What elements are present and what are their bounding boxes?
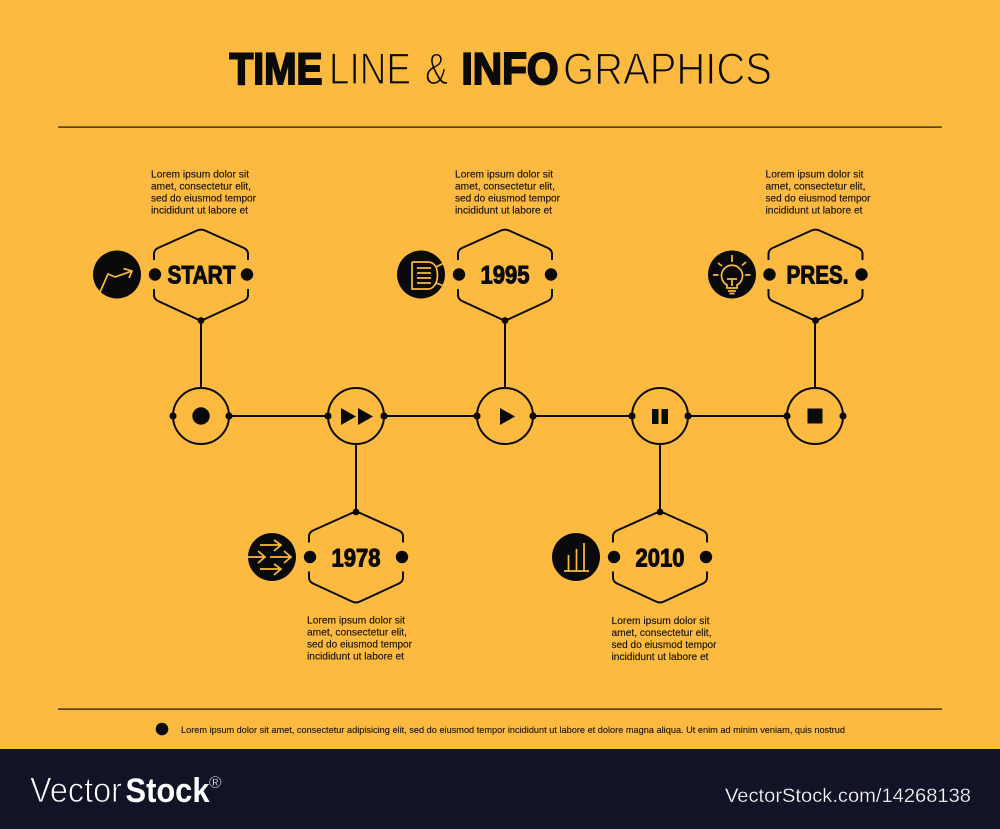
icon: bar chart [552,533,600,581]
text block: 1978 description: amet, consectetur elit, [307,628,407,638]
watermark band [0,749,1000,829]
milestone: PRES. [708,170,871,324]
icon: trend arrow [93,250,141,298]
title: INFO [462,45,558,94]
milestone: START [93,170,257,324]
text block: 2010 description: Lorem ipsum dolor sit [612,616,710,627]
text block: START description: Lorem ipsum dolor sit [151,170,249,180]
label: PRES.: PRES. [786,262,848,290]
label: 2010: 2010 [636,545,684,573]
milestone: 2010 [552,509,717,663]
text block: 1995 description: incididunt ut labore et [455,206,552,216]
text block: 1978 description: Lorem ipsum dolor sit [307,616,405,626]
text block: 1995 description [455,170,561,216]
text block: 1978 description: sed do eiusmod tempor [307,640,413,650]
node: start (record) [169,388,233,444]
logo: Vector [30,771,122,810]
milestone: 1978 [248,509,413,662]
title: & [425,45,448,94]
node: stop [783,388,847,444]
watermark url: VectorStock.com/14268138 [725,785,971,807]
hexagon: PRES. [763,230,868,324]
node: fast forward [324,388,388,444]
text block: START description [151,170,257,216]
label: START: START [168,262,236,290]
hexagon: 2010 [608,509,712,602]
icon: arrows [248,533,296,581]
logo: Stock [126,772,210,810]
node: play [473,388,537,444]
milestone: 1995 [397,170,561,324]
logo [30,771,222,810]
text block: PRES. description [766,170,871,216]
text block: 1995 description: amet, consectetur elit, [455,182,555,192]
hexagon: 1978 [304,509,408,602]
label: 1978: 1978 [332,545,381,573]
text block: 2010 description: incididunt ut labore et [612,652,709,663]
icon: light bulb [708,250,756,298]
title: TIME [230,45,322,94]
text block: 1995 description: sed do eiusmod tempor [455,194,561,204]
title: LINE [329,45,411,94]
footnote: Lorem ipsum dolor sit amet, consectetur adipisicing elit, sed do eiusmod tempor incididunt ut labore et dolore magna aliqua. Ut enim ad minim veniam, quis nostrud [181,725,845,736]
text block: START description: incididunt ut labore et [151,206,248,216]
text block: START description: amet, consectetur elit, [151,182,251,192]
text block: PRES. description: amet, consectetur elit, [766,182,866,192]
text block: PRES. description: sed do eiusmod tempor [766,194,871,204]
hexagon: 1995 [453,230,557,324]
label: 1995: 1995 [480,262,530,290]
text block: PRES. description: Lorem ipsum dolor sit [766,170,864,180]
node: pause [628,388,692,444]
text block: 1995 description: Lorem ipsum dolor sit [455,170,553,180]
text block: PRES. description: incididunt ut labore et [766,206,863,216]
logo: ® [209,773,222,792]
timeline axis [201,321,843,512]
icon: document [397,250,445,298]
text block: START description: sed do eiusmod tempor [151,194,257,204]
text block: 1978 description [307,616,413,662]
text block: 2010 description: amet, consectetur elit, [612,628,712,639]
text block: 1978 description: incididunt ut labore et [307,652,404,662]
hexagon: START [149,230,253,324]
text block: 2010 description [612,616,717,663]
text block: 2010 description: sed do eiusmod tempor [612,640,717,651]
title [230,45,772,94]
title: GRAPHICS [563,45,772,94]
